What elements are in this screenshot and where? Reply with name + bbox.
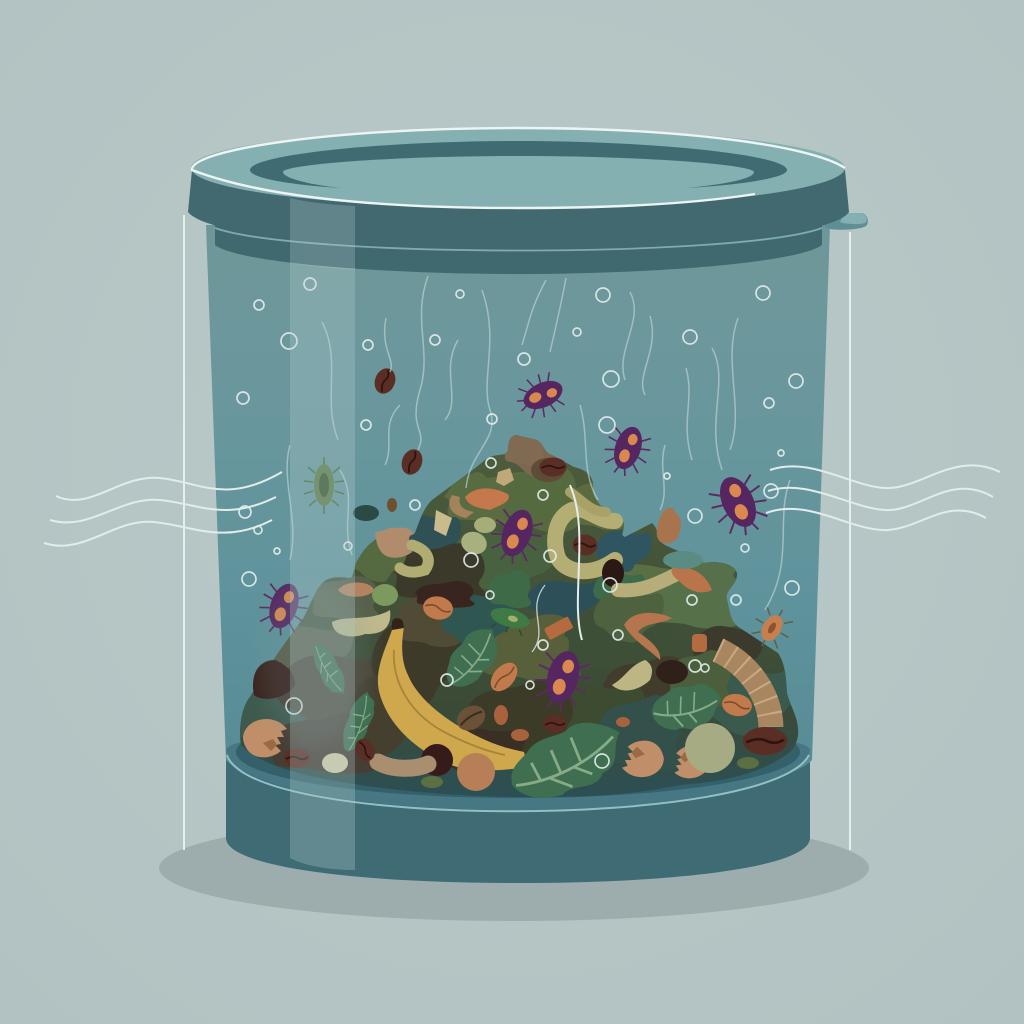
wind lines: left: [44, 472, 282, 546]
small chunks upper: [496, 468, 514, 486]
khaki chunk: [612, 660, 652, 690]
mites: [253, 367, 776, 716]
lid: [188, 128, 868, 274]
falling beans: [353, 365, 426, 521]
lid rim: [188, 170, 849, 249]
compost pile: [232, 424, 798, 801]
eggshell top left: [375, 527, 414, 558]
camouflage blobs: [232, 424, 795, 776]
green microbe: [304, 457, 344, 514]
khaki curl left: [400, 545, 428, 572]
steam lines: [287, 276, 790, 610]
pile shadow on dish: [236, 706, 800, 798]
wind lines: right: [766, 465, 1000, 530]
banana: [378, 618, 526, 770]
lid underside ring: [215, 225, 822, 274]
rim lower line: [215, 228, 822, 250]
teal patch: [663, 551, 703, 569]
highlight band over lid rim: [290, 198, 355, 270]
orange chunk: [692, 634, 707, 652]
orange curled peel: [672, 567, 712, 592]
walnut: [657, 508, 681, 544]
tan worm: [618, 575, 675, 590]
corrugation ribs: [718, 650, 771, 727]
peel and cream chunks left: [338, 582, 374, 597]
dark oval: [602, 559, 624, 587]
orange peel curl: [624, 613, 672, 660]
corrugated brown worm: [378, 762, 428, 768]
top clump bean: [531, 458, 565, 482]
shells: [243, 719, 287, 757]
vertical glass highlight band: [290, 198, 355, 870]
pile mass: [240, 435, 798, 797]
lid highlight: [192, 128, 845, 208]
bright steam strands over pile: [532, 485, 582, 652]
fog over left pile: [260, 575, 370, 745]
dish rim line: [227, 755, 809, 811]
glass outline lines: [184, 215, 850, 850]
green beetle: [487, 604, 532, 638]
lid top: [191, 128, 845, 208]
container: body glass: [206, 225, 830, 801]
lid tab: [825, 213, 868, 230]
round scraps: [685, 723, 735, 773]
dish inside base: [226, 728, 810, 810]
orange microbe: [745, 600, 799, 656]
leaves: [506, 719, 626, 801]
container: base tray: [226, 750, 810, 883]
bubbles: [237, 278, 803, 768]
orange tile: [544, 616, 574, 640]
pale lump and pebbles: [322, 753, 348, 773]
recess crescent: [250, 141, 787, 188]
corrugated tan arc: [718, 650, 771, 727]
beans and nuts: [421, 594, 455, 622]
khaki coiled peel: [555, 509, 615, 571]
ground shadow: [159, 815, 869, 921]
